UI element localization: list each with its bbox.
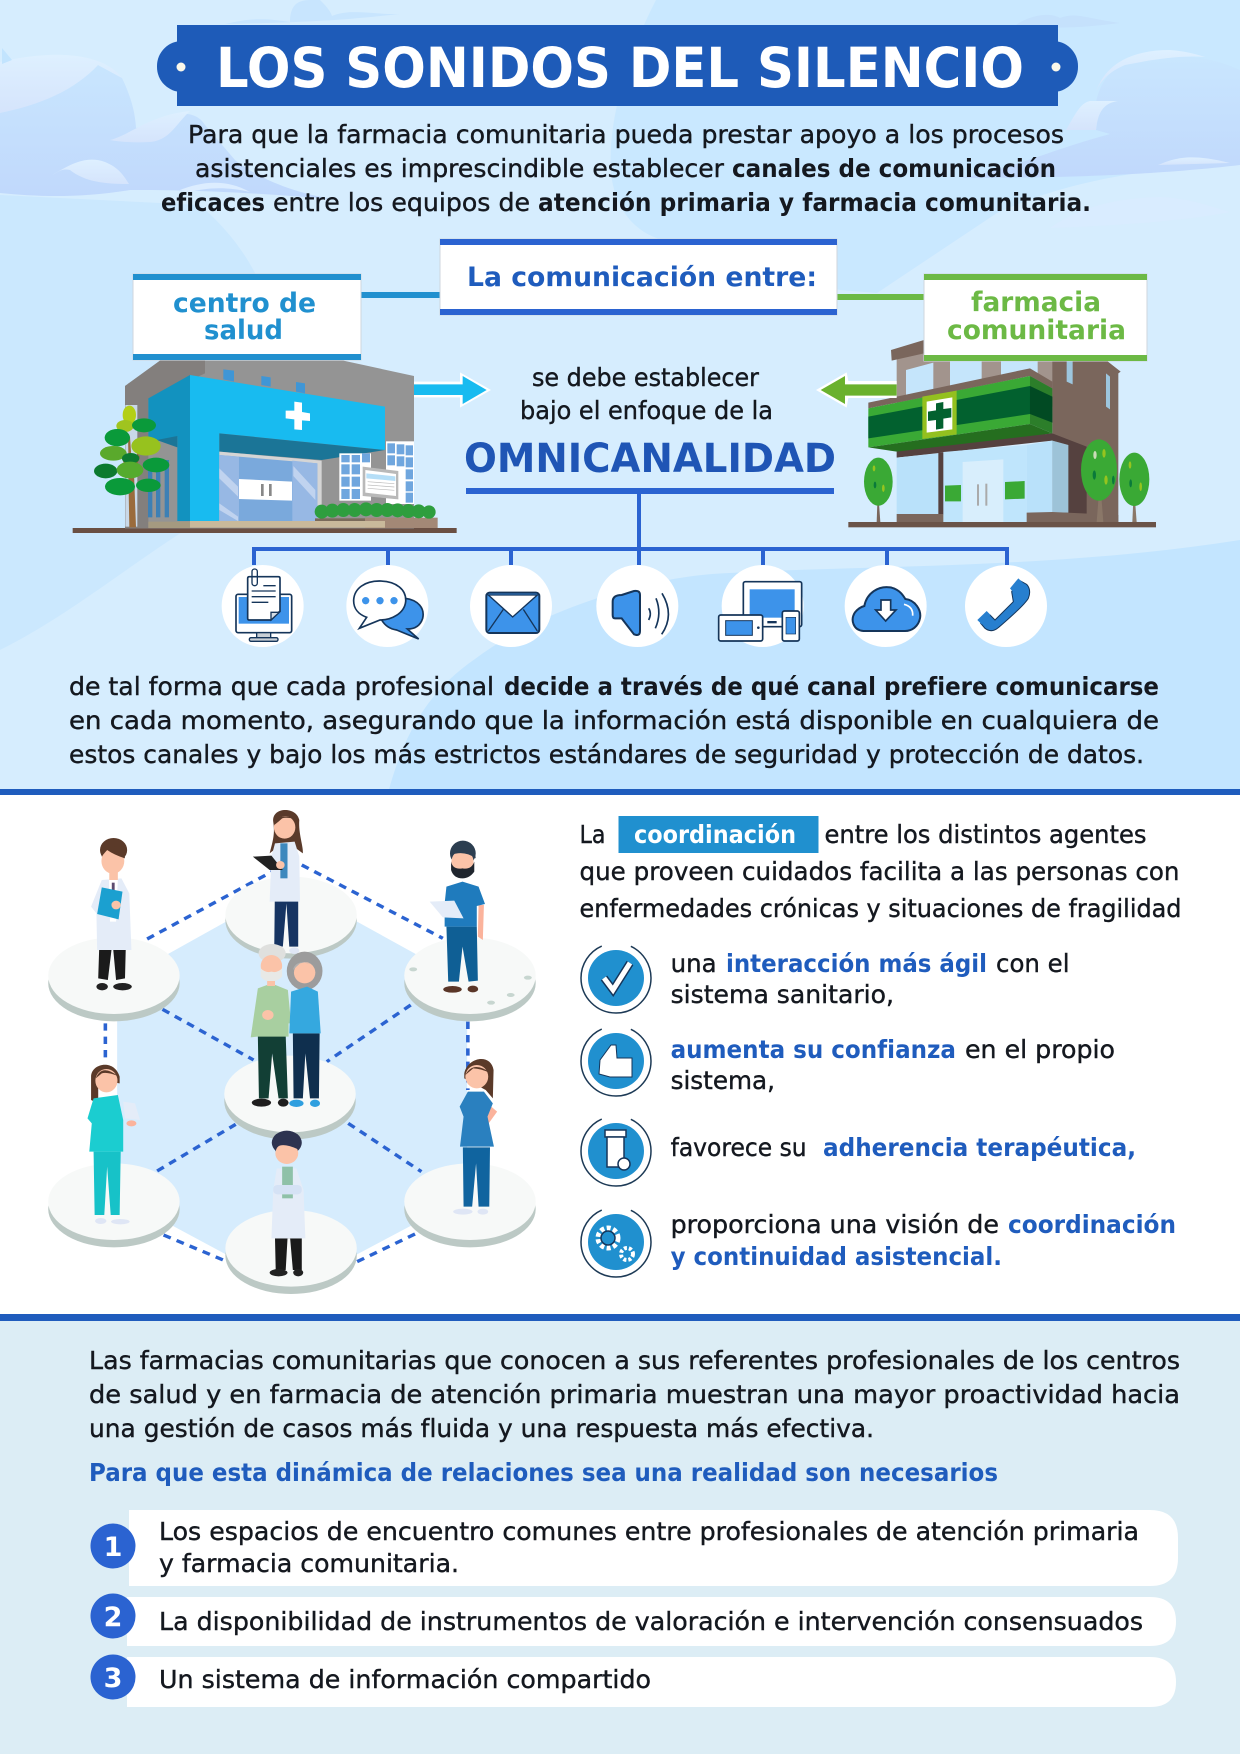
icon: check (581, 943, 651, 1013)
icon: devices (719, 565, 804, 647)
box: centro de salud (133, 274, 361, 360)
icon: speech bubbles (346, 565, 428, 647)
panel: bottom background (0, 1318, 1240, 1754)
benefit 4: coordinación (1008, 1210, 1176, 1239)
benefit 1: interacción más ágil (726, 949, 987, 978)
intro text: canales de comunicación (732, 154, 1056, 183)
centre text: se debe establecer: se debe establecer (532, 363, 760, 392)
centre text: se debe establecer (520, 363, 773, 425)
benefit 1: una (671, 949, 717, 978)
benefit 3: favorece su (671, 1133, 807, 1162)
connector lines (361, 292, 924, 300)
icon: medicine bottle (581, 1116, 651, 1186)
item 2: 2 (104, 1602, 122, 1633)
arrow: pharmacy to centre (816, 372, 897, 408)
box: la comunicación entre (440, 239, 837, 315)
item 2: La disponibilidad de instrumentos de valoración e intervención consensuados (159, 1607, 1143, 1636)
box: farmacia comunitaria: farmacia (971, 287, 1101, 318)
icon: cloud download (845, 565, 927, 647)
benefit 4: y continuidad asistencial. (671, 1242, 1002, 1271)
person: teal nurse (87, 1065, 140, 1224)
intro text: atención primaria y farmacia comunitaria. (538, 188, 1091, 217)
person: elderly woman (287, 952, 322, 1107)
coordinación statement: enfermedades crónicas y situaciones de fragilidad (580, 894, 1182, 923)
benefit 4 (671, 1210, 1176, 1271)
title text: LOS SONIDOS DEL SILENCIO (216, 36, 1024, 100)
person: elderly man (251, 944, 291, 1107)
benefit 2: sistema, (671, 1066, 775, 1095)
item 3: 3 (104, 1663, 122, 1694)
bottom paragraph: una gestión de casos más fluida y una respuesta más efectiva. (89, 1414, 874, 1443)
icon: speaker (596, 565, 678, 647)
heading: omnicanalidad: OMNICANALIDAD (464, 436, 836, 482)
item 2 (90, 1594, 1176, 1646)
benefit 2 (671, 1035, 1115, 1095)
bottom paragraph (89, 1346, 1180, 1443)
item 3: Un sistema de información compartido (159, 1665, 651, 1694)
icon: thumb up (581, 1026, 651, 1096)
benefit 2: aumenta su confianza (671, 1035, 956, 1064)
coordinación statement (580, 816, 1182, 923)
divider bottom (0, 1314, 1240, 1321)
item 1 (90, 1510, 1178, 1586)
arrow: health centre to centre (414, 372, 491, 408)
coordinación statement: entre los distintos agentes (824, 820, 1146, 849)
icon: envelope (470, 565, 552, 647)
benefit 2: en el propio (965, 1035, 1115, 1064)
coordinación statement: La (580, 820, 606, 849)
benefit 1 (671, 949, 1070, 1009)
intro text: eficaces (161, 188, 265, 217)
item 1: y farmacia comunitaria. (159, 1549, 459, 1578)
item 3 (90, 1654, 1176, 1707)
person: doctor with blue folder (91, 838, 132, 990)
box: centro de salud: centro de (173, 288, 316, 319)
highlight: coordinación: coordinación (634, 820, 796, 849)
bottom paragraph: Las farmacias comunitarias que conocen a sus referentes profesionales de los centros (89, 1346, 1180, 1375)
benefit 4: proporciona una visión de (671, 1210, 999, 1239)
closing text: canales: estos canales y bajo los más estrictos estándares de seguridad y protección de datos. (69, 740, 1144, 769)
intro text: entre los equipos de (273, 188, 530, 217)
intro text: Para que la farmacia comunitaria pueda prestar apoyo a los procesos (188, 120, 1064, 149)
icon: telephone (965, 565, 1047, 647)
bottom paragraph: de salud y en farmacia de atención primaria muestran una mayor proactividad hacia (89, 1380, 1180, 1409)
intro text (161, 120, 1091, 217)
panel: coordinación background (0, 793, 1240, 1315)
icon: health centre building (73, 361, 457, 533)
panel: sky background (0, 0, 1240, 793)
box: farmacia comunitaria (924, 274, 1147, 361)
closing text: canales: en cada momento, asegurando que la información está disponible en cualquiera de (69, 706, 1159, 735)
subheading: Para que esta dinámica de relaciones sea una realidad son necesarios (89, 1458, 998, 1487)
person: blue nurse (453, 1059, 497, 1215)
benefit 3 (671, 1133, 1136, 1162)
closing text: canales: de tal forma que cada profesional (69, 672, 494, 701)
icon: gears (581, 1207, 651, 1277)
tree connector to channels (252, 493, 1009, 565)
box: centro de salud: salud (204, 315, 283, 346)
icon: document on monitor (222, 565, 304, 647)
centre text: se debe establecer: bajo el enfoque de la (520, 396, 773, 425)
closing text: canales (69, 672, 1159, 769)
box: la comunicación entre: La comunicación entre: (467, 262, 817, 293)
title banner (157, 25, 1078, 106)
closing text: canales: decide a través de qué canal prefiere comunicarse (504, 672, 1159, 701)
benefit 1: con el (996, 949, 1070, 978)
divider top (0, 789, 1240, 795)
item 1: Los espacios de encuentro comunes entre profesionales de atención primaria (159, 1517, 1139, 1546)
person: doctor arms crossed (270, 1131, 305, 1276)
benefit 3: adherencia terapéutica, (823, 1133, 1136, 1162)
benefit 1: sistema sanitario, (671, 980, 894, 1009)
box: farmacia comunitaria: comunitaria (947, 315, 1126, 346)
coordinación statement: que proveen cuidados facilita a las personas con (580, 857, 1180, 886)
intro text: asistenciales es imprescindible establecer (195, 154, 725, 183)
person: doctor with clipboard (253, 810, 303, 954)
hexagon network illustration (48, 810, 536, 1294)
person: bearded nurse (430, 841, 485, 993)
item 1: 1 (104, 1532, 122, 1563)
icon: pharmacy building (848, 340, 1156, 527)
